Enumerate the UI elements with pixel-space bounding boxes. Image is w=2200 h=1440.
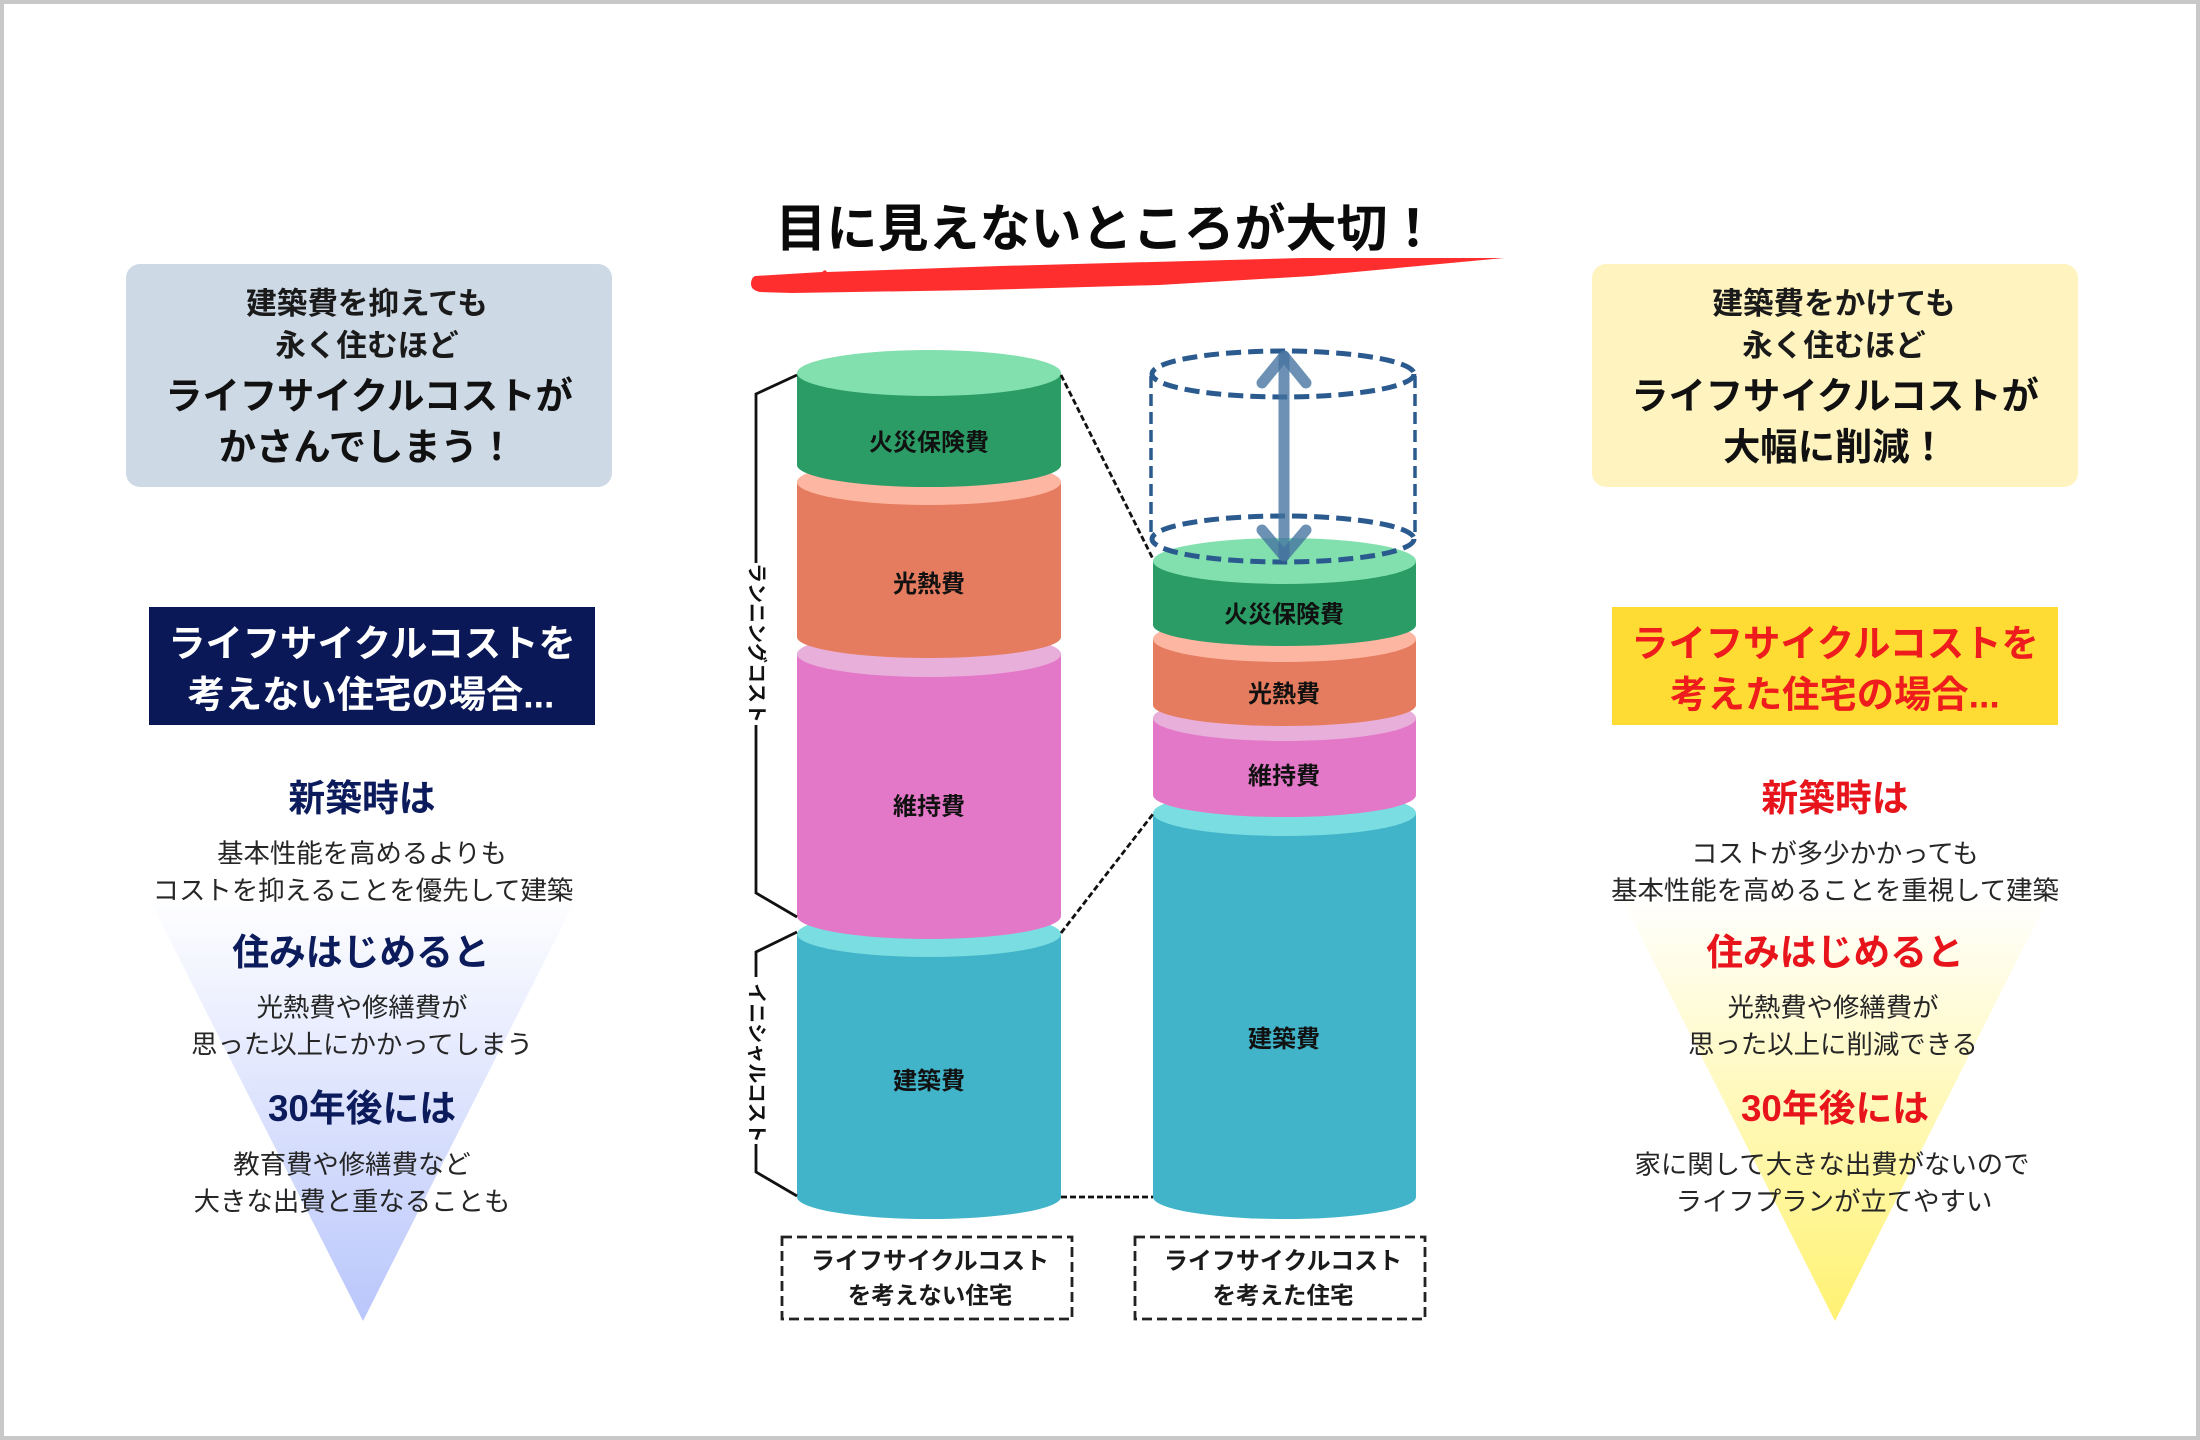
- summary text: [165, 287, 573, 468]
- step: move in: [191, 932, 533, 1060]
- step: 30 years later: [1634, 1088, 2030, 1216]
- segment: utilities: [1153, 616, 1416, 726]
- segment: construction cost: [1153, 790, 1416, 1219]
- summary text: かさんでしまう！: [219, 426, 515, 468]
- step: new build: [1611, 778, 2059, 906]
- segment: maintenance cost: 維持費: [1248, 763, 1320, 790]
- connector lines between cylinders: [1061, 375, 1153, 1197]
- step: new build: 基本性能を高めることを重視して建築: [1611, 876, 2059, 906]
- title: 目に見えないところが大切！: [775, 200, 1439, 258]
- step: move in: 光熱費や修繕費が: [1727, 992, 1939, 1022]
- label box: without planning: を考えない住宅: [848, 1282, 1012, 1308]
- segment: construction cost: [797, 911, 1061, 1219]
- summary text: 建築費をかけても: [1712, 287, 1956, 321]
- segment: construction cost: 建築費: [893, 1068, 965, 1095]
- red brush underline: [751, 258, 1504, 293]
- step: new build: [153, 778, 573, 906]
- segment: utilities: [797, 459, 1061, 658]
- panel: left summary: [126, 264, 612, 487]
- gradient triangle: [1620, 895, 2050, 1321]
- panel: left timeline: [147, 778, 578, 1321]
- step: 30 years later: 大きな出費と重なることも: [194, 1186, 510, 1216]
- segment: maintenance cost: [1153, 695, 1416, 817]
- step: new build: コストを抑えることを優先して建築: [153, 876, 573, 906]
- bracket: initial cost: イニシャルコスト: [745, 983, 767, 1143]
- segment: fire insurance: 火災保険費: [1224, 602, 1344, 628]
- step: move in: 光熱費や修繕費が: [256, 992, 468, 1022]
- ghost cylinder: reduced cost: [1151, 351, 1415, 562]
- bracket: running cost: ランニングコスト: [745, 563, 769, 723]
- summary text: 永く住むほど: [1742, 329, 1926, 363]
- step: move in: 住みはじめると: [1706, 932, 1964, 973]
- step: 30 years later: ライフプランが立てやすい: [1676, 1186, 1992, 1216]
- step: 30 years later: 30年後には: [268, 1088, 456, 1129]
- step: 30 years later: 30年後には: [1741, 1088, 1929, 1129]
- segment: fire insurance: [797, 350, 1061, 487]
- panel: left heading: ライフサイクルコストを: [168, 622, 576, 664]
- chart: cost with lifecycle planning: [1153, 538, 1416, 1219]
- step: move in: 思った以上にかかってしまう: [191, 1030, 533, 1060]
- segment: maintenance cost: 維持費: [893, 794, 965, 820]
- segment: utilities: 光熱費: [1248, 681, 1320, 708]
- summary text: 永く住むほど: [275, 329, 459, 363]
- gradient triangle: [147, 895, 578, 1321]
- step: new build: 基本性能を高めるよりも: [217, 838, 507, 868]
- panel: left heading: 考えない住宅の場合...: [188, 674, 554, 716]
- segment: utilities: 光熱費: [893, 571, 965, 598]
- panel: left heading: [149, 607, 595, 725]
- step: new build: コストが多少かかっても: [1691, 838, 1979, 868]
- step: 30 years later: 教育費や修繕費など: [233, 1150, 471, 1180]
- segment: maintenance cost: [797, 631, 1061, 939]
- label box: without planning: ライフサイクルコスト: [811, 1248, 1049, 1275]
- label box: with planning: を考えた住宅: [1212, 1282, 1354, 1308]
- step: 30 years later: [194, 1088, 510, 1216]
- summary text: 大幅に削減！: [1723, 426, 1947, 468]
- summary text: 建築費を抑えても: [246, 287, 488, 321]
- bracket: initial cost: [745, 932, 797, 1196]
- segment: construction cost: 建築費: [1248, 1026, 1320, 1053]
- step: 30 years later: 家に関して大きな出費がないので: [1634, 1150, 2030, 1180]
- segment: fire insurance: 火災保険費: [869, 430, 989, 456]
- step: new build: 新築時は: [1761, 778, 1909, 819]
- segment: fire insurance: [1153, 538, 1416, 646]
- panel: right heading: ライフサイクルコストを: [1631, 622, 2039, 664]
- label box: with planning: [1135, 1237, 1425, 1319]
- label box: without planning: [782, 1237, 1072, 1319]
- step: move in: [1688, 932, 1978, 1060]
- summary text: ライフサイクルコストが: [165, 375, 573, 417]
- chart: cost without lifecycle planning: [797, 350, 1061, 1219]
- label box: with planning: ライフサイクルコスト: [1164, 1248, 1402, 1275]
- step: move in: 思った以上に削減できる: [1688, 1030, 1978, 1060]
- panel: right heading: [1612, 607, 2058, 725]
- panel: right timeline: [1611, 778, 2059, 1321]
- summary text: [1631, 287, 2039, 468]
- panel: right heading: 考えた住宅の場合...: [1670, 674, 2000, 716]
- bracket: running cost: [745, 375, 797, 917]
- summary text: ライフサイクルコストが: [1631, 375, 2039, 417]
- step: move in: 住みはじめると: [232, 932, 490, 973]
- panel: right summary: [1592, 264, 2078, 487]
- arrow: double-headed reduction: [1262, 356, 1306, 556]
- step: new build: 新築時は: [288, 778, 436, 819]
